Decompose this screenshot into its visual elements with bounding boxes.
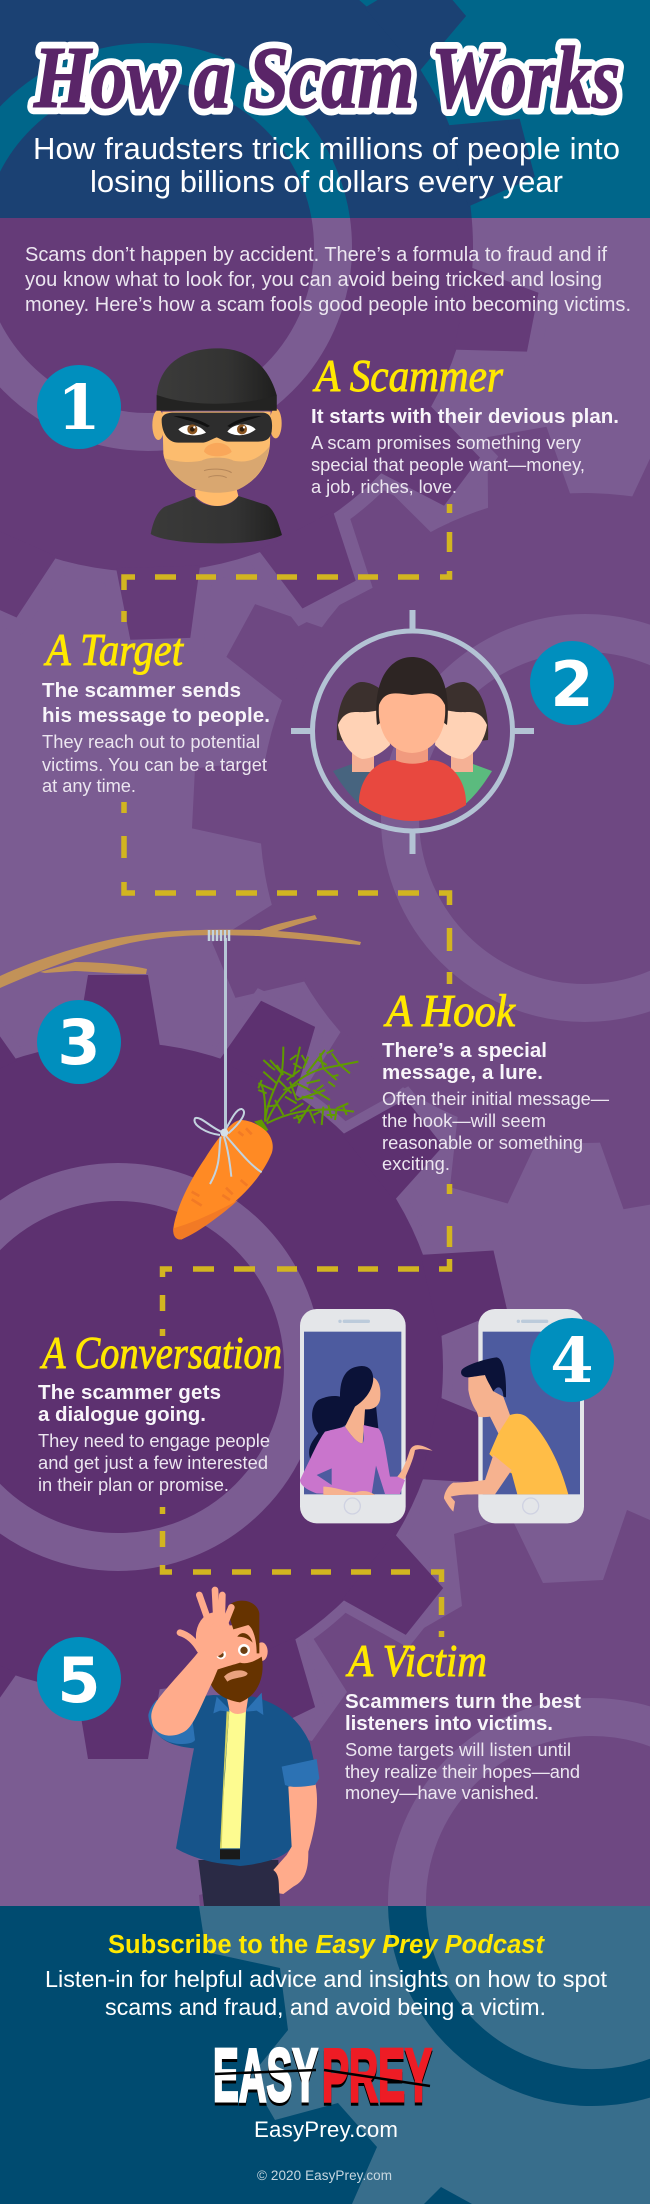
icon: two people talking through phones xyxy=(300,1309,584,1523)
heading: A Victim: A Victim xyxy=(345,1635,487,1686)
step 5 text: a victim: Scammers turn the best xyxy=(345,1690,581,1713)
step 5 text: a victim: they realize their hopes—and xyxy=(345,1761,580,1782)
step 1 text: a scammer: a job, riches, love. xyxy=(311,476,457,497)
step 3 text: a hook: message, a lure. xyxy=(382,1061,543,1084)
subtitle: losing billions of dollars every year xyxy=(90,164,563,199)
number badge 4: 4 xyxy=(550,1324,594,1397)
intro text: money. Here’s how a scam fools good people into becoming victims. xyxy=(25,294,631,316)
step 4 text: a conversation: and get just a few interested xyxy=(38,1452,268,1473)
step 4 text: a conversation: in their plan or promise. xyxy=(38,1474,229,1495)
step 2 text: a target: They reach out to potential xyxy=(42,731,260,752)
number badge 3: 3 xyxy=(57,1006,101,1079)
main purple background gears xyxy=(0,218,650,1906)
footer call to action: Listen-in for helpful advice and insights on how to spot xyxy=(45,1966,608,1992)
intro text: Scams don’t happen by accident. There’s a formula to fraud and if xyxy=(25,244,607,266)
heading: A Conversation: A Conversation xyxy=(39,1327,282,1378)
footer call to action: Subscribe to the Easy Prey Podcast xyxy=(108,1931,546,1959)
icon: masked scammer xyxy=(151,348,282,543)
intro text: you know what to look for, you can avoid being tricked and losing xyxy=(25,269,602,291)
heading: A Scammer: A Scammer xyxy=(312,350,504,401)
woman xyxy=(300,1366,433,1495)
step 5 text: a victim: listeners into victims. xyxy=(345,1712,553,1735)
intro text xyxy=(25,244,631,316)
step 4 text: a conversation xyxy=(38,1327,282,1495)
step 4 text: a conversation: a dialogue going. xyxy=(38,1403,206,1426)
copyright: © 2020 EasyPrey.com xyxy=(257,2168,392,2183)
right phone xyxy=(478,1309,584,1523)
step 1 text: a scammer: It starts with their devious plan. xyxy=(311,405,619,428)
header background gear xyxy=(0,0,650,218)
number badge 4 xyxy=(530,1318,614,1402)
step 5 text: a victim xyxy=(345,1635,581,1803)
step 5 text: a victim: money—have vanished. xyxy=(345,1782,539,1803)
step 1 text: a scammer: special that people want—money, xyxy=(311,454,585,475)
footer call to action xyxy=(45,1931,608,2020)
footer background gear xyxy=(0,1906,650,2204)
dashed connector path xyxy=(124,504,450,1637)
heading: A Hook: A Hook xyxy=(383,985,516,1036)
number badge 3 xyxy=(37,1000,121,1084)
logo: Easy Prey: EASY xyxy=(213,2033,318,2117)
icon: carrot on a string xyxy=(173,1047,358,1239)
step 2 text: a target: victims. You can be a target xyxy=(42,754,267,775)
number badge 5 xyxy=(37,1637,121,1721)
step 2 text: a target: at any time. xyxy=(42,775,136,796)
subtitle: How fraudsters trick millions of people into xyxy=(33,131,620,166)
number badge 5: 5 xyxy=(57,1644,101,1717)
heading: A Target: A Target xyxy=(43,624,184,675)
step 3 text: a hook: exciting. xyxy=(382,1153,450,1174)
number badge 1 xyxy=(37,365,121,449)
logo: Easy Prey: EASY xyxy=(213,2036,318,2120)
step 1 text: a scammer xyxy=(311,350,619,497)
branch and hanging string xyxy=(0,915,361,1133)
step 2 text: a target: The scammer sends xyxy=(42,679,241,702)
step 5 text: a victim: Some targets will listen until xyxy=(345,1739,571,1760)
step 3 text: a hook: reasonable or something xyxy=(382,1132,583,1153)
icon: target crosshair with people xyxy=(291,610,534,854)
step 3 text: a hook: There’s a special xyxy=(382,1039,547,1062)
footer call to action: scams and fraud, and avoid being a victim. xyxy=(105,1994,546,2020)
step 3 text: a hook xyxy=(382,985,610,1174)
step 3 text: a hook: Often their initial message— xyxy=(382,1088,610,1109)
subtitle xyxy=(33,131,620,199)
number badge 2 xyxy=(530,641,614,725)
left phone xyxy=(300,1309,406,1523)
number badge 1: 1 xyxy=(57,371,101,444)
website link: EasyPrey.com xyxy=(254,2117,398,2142)
step 4 text: a conversation: The scammer gets xyxy=(38,1381,221,1404)
step 2 text: a target xyxy=(42,624,270,796)
step 3 text: a hook: the hook—will seem xyxy=(382,1110,546,1131)
icon: man with hand on forehead xyxy=(148,1590,319,1906)
man in phone xyxy=(444,1357,568,1512)
step 1 text: a scammer: A scam promises something very xyxy=(311,432,582,453)
step 4 text: a conversation: They need to engage people xyxy=(38,1430,270,1451)
step 2 text: a target: his message to people. xyxy=(42,704,270,727)
logo: Easy Prey: PREY xyxy=(322,2033,432,2117)
logo: Easy Prey: PREY xyxy=(322,2036,432,2120)
number badge 2: 2 xyxy=(550,648,594,721)
